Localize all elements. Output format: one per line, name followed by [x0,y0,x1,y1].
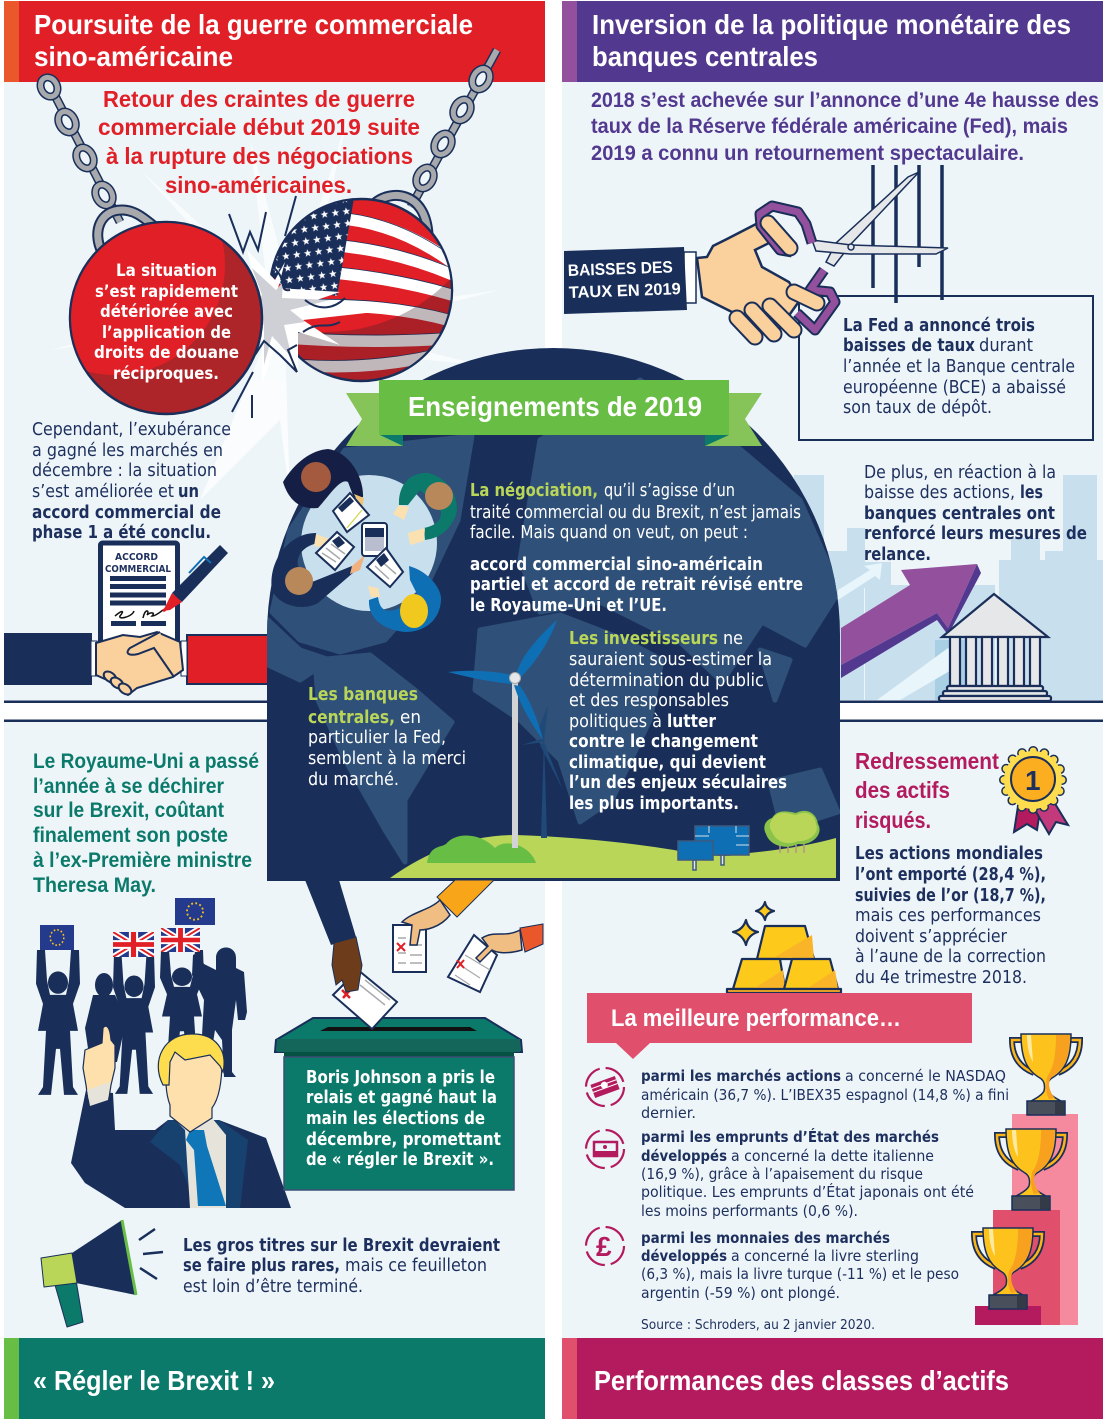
icon: right chain [375,50,497,234]
text: Brexit intro: Theresa May. [33,873,156,897]
panel: trade war explosion background [50,110,500,500]
text: Brexit intro: l’année à se déchirer [33,774,225,798]
text: Fed baisses intro: 2019 a connu un retournement spectaculaire. [591,141,1024,165]
text: world equities: mais ces performances [855,906,1041,926]
text: red ball situation: détériorée avec [100,302,233,321]
text: central banks strengthen: relance. [864,545,931,565]
person bottom-left [271,533,365,607]
text: exuberance in December: a gagné les marchés en [32,441,223,461]
text: les banques centrales: semblent à la merci [308,749,466,769]
text: Boris Johnson won: main les élections de [306,1109,485,1129]
heading: redressement des actifs risqués: des actifs [855,777,950,803]
text: equities: dernier. [641,1104,696,1122]
text: les banques centrales: particulier la Fed, [308,728,446,748]
text: exuberance in December [32,420,231,543]
subheading: red trade war intro: Retour des craintes de guerre [103,86,415,112]
text: les banques centrales: en [400,708,421,728]
callout: la meilleure performance: La meilleure performance… [611,1005,901,1032]
text: central banks strengthen: banques centrales ont [864,504,1055,524]
heading: redressement des actifs risqués: risqués. [855,807,931,833]
label: rate cuts sleeve: TAUX EN 2019 [569,280,681,302]
text: exuberance in December: accord commercial de [32,503,221,523]
icon: American flag wrecking ball [270,198,454,382]
text: Boris Johnson won: relais et gagné haut la [306,1088,497,1108]
text: les banques centrales [308,685,466,790]
icon: solar panels [678,826,749,870]
icon: UK flag left [113,932,154,957]
heading band: left top: Poursuite de la guerre commerciale [34,9,473,40]
icon: UK flag right [161,928,200,952]
text: currencies: (6,3 %), mais la livre turque (-11 %) et le peso [641,1265,959,1283]
text: world equities [855,844,1046,988]
icon: red wrecking ball [68,220,264,416]
text: Brexit headlines: mais ce feuilleton [345,1256,487,1276]
icon: tree [764,811,820,853]
panel: Fed text box: son taux de dépôt. [843,398,992,418]
text: Boris Johnson won: de « régler le Brexit ». [306,1150,494,1170]
text: les investisseurs: ne [723,629,743,649]
heading band: left top [4,1,545,82]
panel: Fed text box: l’année et la Banque centrale [843,357,1075,377]
text: equities [641,1067,1009,1122]
icon: signed trade agreement [100,543,228,648]
text: world equities: du 4e trimestre 2018. [855,968,1027,988]
text: Brexit intro: finalement son poste [33,823,228,847]
text: central banks strengthen: De plus, en réaction à la [864,463,1056,483]
podium with trophies [974,1034,1080,1325]
icon: medal [1004,751,1068,834]
panel: central dome [267,348,840,881]
text: la négociation: le Royaume-Uni et l’UE. [470,596,667,616]
text: red ball situation: l’application de [102,323,231,342]
text: les investisseurs: lutter [667,712,716,732]
heading: redressement des actifs risqués [855,748,999,833]
icon: wind turbine [448,620,563,848]
text: la négociation [470,481,803,616]
text: la négociation: facile. Mais quand on veut, on peut : [470,523,748,543]
text: red ball situation: réciproques. [113,364,219,383]
illustration: crowd with flags [36,898,247,1095]
text: government bonds: les moins performants (0,6 %). [641,1202,858,1220]
text: central banks strengthen: les [1020,483,1043,503]
text: world equities: suivies de l’or (18,7 %), [855,886,1046,906]
text: world equities: à l’aune de la correction [855,947,1046,967]
icon: medal: 1 [1025,765,1041,796]
icon: signed trade agreement: COMMERCIAL [105,564,171,575]
icon: EU flag left [40,925,74,950]
text: les investisseurs: climatique, qui devient [569,753,766,773]
text: equities: a concerné le NASDAQ [845,1067,1006,1085]
text: Brexit intro [33,749,259,897]
text: world equities: doivent s’apprécier [855,927,1008,947]
illustration: city skyline background [794,475,1103,700]
text: la négociation: traité commercial ou du Brexit, n’est jamais [470,503,801,523]
text: la négociation: accord commercial sino-américain [470,555,763,575]
icon: gold bars [727,902,841,993]
heading ribbon: Enseignements de 2019 [346,380,762,446]
text: les banques centrales: centrales, [308,708,395,728]
label: rate cuts sleeve: BAISSES DES [568,258,673,280]
text: Brexit headlines [183,1236,500,1297]
icon: rising arrow [841,564,981,700]
label: rate cuts sleeve [564,247,687,314]
text: government bonds: (16,9 %), grâce à l’apaisement du risque [641,1165,923,1183]
icon: government bonds [586,1130,624,1168]
text: world equities: l’ont emporté (28,4 %), [855,865,1046,885]
icon: left chain [37,74,155,252]
text: exuberance in December: Cependant, l’exubérance [32,420,231,440]
text: government bonds: développés [641,1147,727,1165]
text: les investisseurs: les plus importants. [569,794,739,814]
illustration: people around negotiating table [271,449,457,632]
text: Fed baisses intro: taux de la Réserve fédérale américaine (Fed), mais [591,114,1068,138]
text: currencies [641,1229,959,1302]
text: currencies: parmi les monnaies des marchés [641,1229,890,1247]
icon: lower trophy [974,1228,1042,1309]
text: government bonds: a concerné la dette italienne [731,1147,934,1165]
text: central banks strengthen: baisse des actions, [864,483,1015,503]
text: Brexit intro: sur le Brexit, coûtant [33,798,224,822]
text: la négociation: qu’il s’agisse d’un [604,481,735,501]
text: Boris Johnson won [306,1068,501,1170]
text: les banques centrales: du marché. [308,770,399,790]
text: exuberance in December: phase 1 a été conclu. [32,523,211,543]
text: red ball situation [94,261,239,383]
text: les investisseurs: contre le changement [569,732,758,752]
heading: redressement des actifs risqués: Redressement [855,748,999,774]
text: les investisseurs: sauraient sous-estimer la [569,650,772,670]
text: les investisseurs: Les investisseurs [569,629,718,649]
text: source: Source : Schroders, au 2 janvier 2020. [641,1317,875,1333]
text: les investisseurs: politiques à [569,712,662,732]
illustration: world map [268,380,840,862]
text: currencies: a concerné la livre sterling [731,1247,919,1265]
icon: top trophy [1012,1034,1080,1115]
panel: Fed text box: européenne (BCE) a abaissé [843,378,1066,398]
illustration: ballots and hands [275,880,543,1190]
text: Brexit intro: Le Royaume-Uni a passé [33,749,259,773]
text: exuberance in December: un [178,482,199,502]
icon: pound sterling: £ [596,1231,612,1262]
text: les investisseurs [569,629,787,814]
icon: middle trophy [997,1129,1065,1210]
text: la négociation: partiel et accord de retrait révisé entre [470,575,803,595]
heading band: right bottom [562,1338,1103,1419]
person top-right [393,473,457,545]
text: Brexit headlines: Les gros titres sur le Brexit devraient [183,1236,500,1256]
heading band: right bottom: Performances des classes d’actifs [594,1365,1009,1396]
icon: EU flag top [175,898,215,925]
text: government bonds [641,1127,974,1220]
subheading: red trade war intro [98,86,420,198]
illustration: Boris Johnson [71,1026,291,1208]
text: exuberance in December: décembre : la situation [32,461,217,481]
text: equities: parmi les marchés actions [641,1067,841,1085]
heading ribbon: Enseignements de 2019: Enseignements de 2019 [408,391,702,422]
panel: Fed text box: baisses de taux [843,336,976,356]
text: Brexit intro: à l’ex-Première ministre [33,848,252,872]
text: Boris Johnson won: Boris Johnson a pris le [306,1068,495,1088]
heading band: left bottom [4,1338,545,1419]
icon: signed trade agreement: ACCORD [115,552,158,563]
icon: ballot box [275,1018,522,1190]
icon: megaphone [41,1220,163,1327]
text: Boris Johnson won: décembre, promettant [306,1130,501,1150]
heading band: right top: Inversion de la politique monétaire des [592,9,1071,40]
text: government bonds: parmi les emprunts d’État des marchés [641,1127,939,1146]
icon: pound sterling [586,1227,624,1265]
callout: la meilleure performance [587,993,972,1059]
text: la négociation: La négociation, [470,481,598,501]
text: currencies: développés [641,1247,727,1265]
text: les banques centrales: Les banques [308,685,418,705]
text: government bonds: politique. Les emprunts d’État japonais ont été [641,1182,974,1201]
panel: Fed text box [799,296,1093,440]
text: Fed baisses intro [591,88,1099,165]
icon: collision burst [229,196,375,418]
subheading: red trade war intro: commerciale début 2019 suite [98,114,420,140]
person top-left [283,449,364,510]
panel: Fed text box: La Fed a annoncé trois [843,316,1035,336]
panel: Fed text box: durant [979,336,1033,356]
icon: central bank building [939,594,1051,701]
heading band: left top: sino-américaine [34,41,233,72]
text: world equities: Les actions mondiales [855,844,1043,864]
subheading: red trade war intro: à la rupture des négociations [106,143,413,169]
person bottom-right [368,566,441,632]
text: exuberance in December: s’est améliorée et [32,482,174,502]
text: currencies: argentin (-59 %) ont plongé. [641,1284,840,1302]
illustration: green hill [390,835,836,878]
text: red ball situation: s’est rapidement [95,282,238,301]
text: red ball situation: droits de douane [94,343,239,362]
text: les investisseurs: détermination du public [569,671,764,691]
documents on table [316,493,403,587]
text: equities: américain (36,7 %). L’IBEX35 espagnol (14,8 %) a fini [641,1086,1009,1104]
text: les investisseurs: l’un des enjeux séculaires [569,773,787,793]
heading band: right top [562,1,1103,82]
text: central banks strengthen [864,463,1087,565]
icon: handshake [4,632,269,697]
text: Brexit headlines: se faire plus rares, [183,1256,340,1276]
text: red ball situation: La situation [116,261,217,280]
icon: hand cutting rate lines with scissors [564,165,948,337]
text: les investisseurs: et des responsables [569,691,729,711]
heading band: left bottom: « Régler le Brexit ! » [33,1365,275,1396]
subheading: red trade war intro: sino-américaines. [165,172,352,198]
heading band: right top: banques centrales [592,41,818,72]
icon: equities money [586,1068,624,1106]
text: Brexit headlines: est loin d’être terminé. [183,1277,363,1297]
